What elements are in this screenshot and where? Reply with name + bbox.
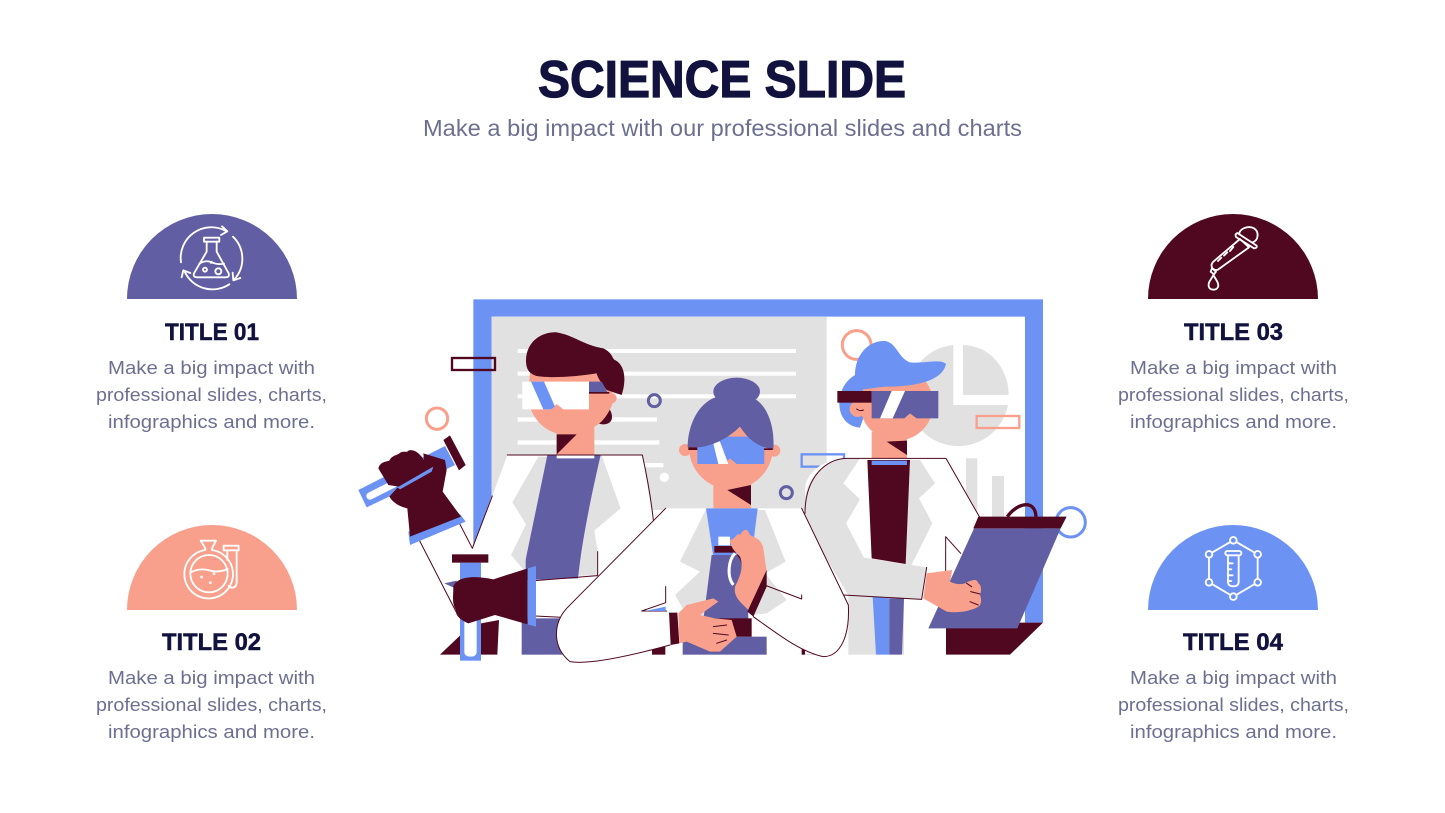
clipboard xyxy=(923,505,1067,628)
heading: TITLE 04 xyxy=(1183,629,1284,656)
text block xyxy=(1118,358,1349,432)
text block: Make a big impact with xyxy=(108,668,315,688)
subtitle: Make a big impact with our professional slides and charts xyxy=(423,115,1022,141)
decorative shapes xyxy=(426,331,1085,537)
text block: professional slides, charts, xyxy=(1118,385,1349,405)
text block: professional slides, charts, xyxy=(96,695,327,715)
presentation board xyxy=(473,299,1043,623)
text block: infographics and more. xyxy=(108,412,315,432)
floor blocks xyxy=(440,620,1043,655)
scientist right xyxy=(805,341,979,655)
text block: Make a big impact with xyxy=(1130,358,1337,378)
heading: TITLE 02 xyxy=(162,629,261,656)
text block: professional slides, charts, xyxy=(1118,695,1349,715)
panel: title 04 xyxy=(1118,525,1349,742)
text block: infographics and more. xyxy=(1130,722,1337,742)
title: SCIENCE SLIDE xyxy=(538,51,906,109)
panel: title 02 xyxy=(96,525,327,742)
icon: semicircle with flask and cycle arrows xyxy=(127,214,297,299)
text block xyxy=(96,358,327,432)
scientist centre xyxy=(556,378,849,662)
text block: infographics and more. xyxy=(108,722,315,742)
scientist left xyxy=(417,332,653,655)
text block xyxy=(96,668,327,742)
text block: Make a big impact with xyxy=(108,358,315,378)
panel: title 03 xyxy=(1118,214,1349,432)
central illustration: scientists at a board xyxy=(358,299,1085,662)
heading: TITLE 03 xyxy=(1184,319,1283,346)
raised glove holding test tube xyxy=(358,435,466,545)
text block: Make a big impact with xyxy=(1130,668,1337,688)
panel: title 01 xyxy=(96,214,327,432)
heading: TITLE 01 xyxy=(165,319,259,346)
text block xyxy=(1118,668,1349,742)
text block: professional slides, charts, xyxy=(96,385,327,405)
icon: semicircle with hexagon and test tube xyxy=(1148,525,1318,610)
icon: semicircle with dropper xyxy=(1148,214,1318,299)
text block: infographics and more. xyxy=(1130,412,1337,432)
icon: semicircle with round flask and tube xyxy=(127,525,297,610)
lower glove with test tube xyxy=(444,554,536,661)
